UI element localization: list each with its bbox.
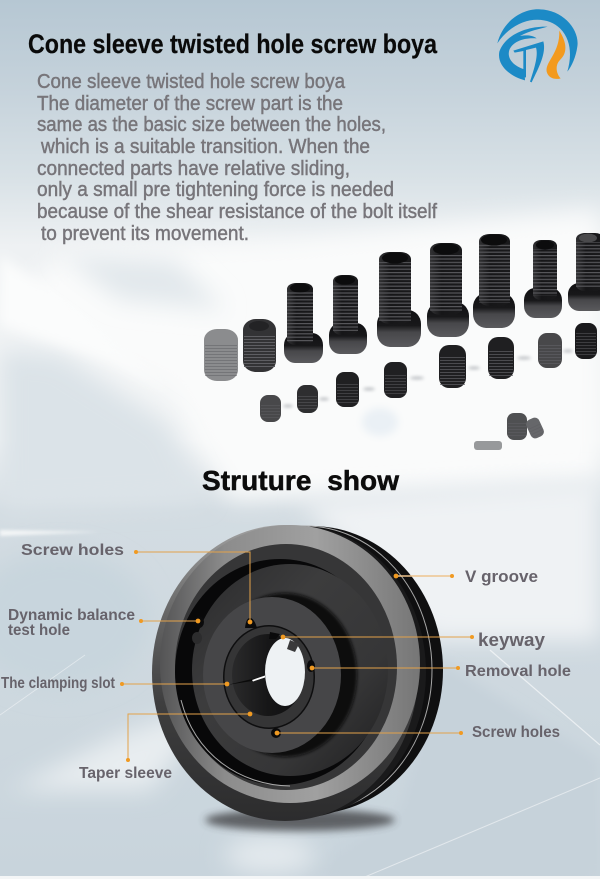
outer face rim [152,525,418,821]
description text: because of the shear resistance of the bolt itself [37,201,437,223]
cap screw 4 [427,243,469,337]
screw shadows [283,350,573,408]
ground shadow [205,809,395,831]
description text: Cone sleeve twisted hole screw boya [37,71,346,93]
labels: test hole [8,622,70,639]
pulley [152,525,443,831]
description text: same as the basic size between the holes, [37,114,386,136]
logo [497,9,578,82]
description text [37,71,437,245]
bore [232,634,304,716]
cap screw 6 [524,240,562,318]
labels [1,542,571,782]
labels: V groove [465,567,538,586]
callout lines [122,552,472,760]
hub [213,593,357,757]
labels: Removal hole [465,663,571,680]
description text: The diameter of the screw part is the [37,93,343,115]
description text: which is a suitable transition. When the [40,136,370,158]
labels: keyway [478,630,545,650]
description text: only a small pre tightening force is needed [37,179,394,201]
labels: Dynamic balance [8,607,135,624]
recess [175,559,385,785]
screws photo [204,233,600,450]
cap screw 2 [329,275,367,354]
description text: to prevent its movement. [41,223,249,245]
title: Cone sleeve twisted hole screw boya [28,29,438,59]
section heading: Struture show [202,465,399,496]
labels: Screw holes [472,724,560,741]
cap screw 1 [284,283,323,363]
description text: connected parts have relative sliding, [37,158,350,180]
cap screw 3 [377,252,421,347]
callout dots [120,550,474,762]
set screws [204,319,597,450]
cap screw 5 [473,234,515,328]
labels: The clamping slot [1,675,116,692]
cap screw 7 [568,233,600,311]
labels: Screw holes [21,542,124,559]
taper sleeve [223,625,315,729]
clamping slot [227,676,264,685]
holes [192,616,315,738]
v grooves [170,526,443,818]
labels: Taper sleeve [79,765,172,782]
